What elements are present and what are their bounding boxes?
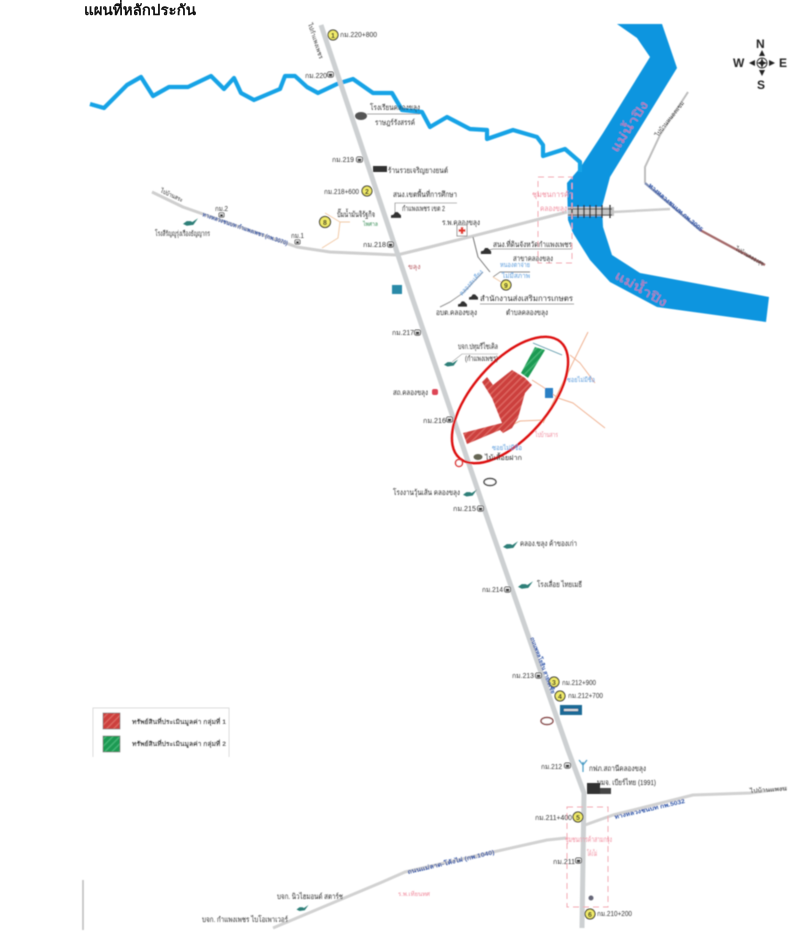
- place labels: กฟภ.สถานีคลองขลุง: [589, 764, 646, 773]
- place labels: โรงสีรัญญูรุ่งเรืองธัญญากร: [155, 229, 210, 238]
- road direction labels: ถนนพหลโยธิน สายเอเชีย: [528, 636, 557, 695]
- km markers: กม.218: [363, 242, 386, 249]
- marker numbers: 3: [552, 680, 556, 687]
- place labels: บจก.ปทุมรีไซเคิล: [458, 342, 498, 351]
- place labels: โรงงานวุ้นเส้น คลองขลุง: [393, 488, 460, 497]
- road direction labels: [158, 21, 787, 876]
- compass: N: [756, 37, 765, 51]
- property side labels: ไม้เลื้อยฝาก: [484, 451, 522, 462]
- highlight ellipse: [431, 317, 589, 483]
- km markers: [215, 32, 632, 918]
- place labels: สนง.เขตพื้นที่การศึกษา: [393, 189, 457, 199]
- marker numbers: 6: [588, 912, 592, 919]
- place labels: สถ.คลองขลุง: [393, 388, 428, 397]
- marker numbers: 8: [323, 220, 327, 227]
- km markers: กม.217: [392, 330, 414, 337]
- km markers: กม.212+900: [562, 680, 596, 687]
- legend: [93, 708, 229, 757]
- compass: S: [757, 78, 765, 92]
- km markers: กม.1: [291, 233, 304, 240]
- km markers: กม.218+600: [324, 189, 359, 196]
- road direction labels: ไปบ้านคลองสุข: [733, 244, 766, 268]
- place labels: บมจ. เบียร์ไทย (1991): [597, 778, 656, 787]
- icons: ไพศาล: [362, 220, 378, 228]
- compass: W: [733, 56, 745, 70]
- marker numbers: 9: [504, 283, 508, 290]
- km markers: กม.212: [541, 764, 562, 771]
- river label: [606, 97, 671, 310]
- zone labels: ชุมชนการค้าสามกรุง: [565, 835, 612, 844]
- zone labels: คลองขลุง: [540, 204, 567, 213]
- road direction labels: คลองสะเดียง: [458, 268, 485, 297]
- property group 2: [521, 347, 545, 378]
- property side labels: ซอยไม่มีชื่อ: [567, 375, 595, 384]
- marker numbers: 2: [365, 189, 369, 196]
- marker numbers: [323, 33, 592, 919]
- place labels: [155, 103, 656, 924]
- marker numbers: 4: [558, 694, 562, 701]
- road direction labels: ทางหลวงชนบท กพ.5032: [614, 798, 686, 821]
- km markers: กม.220+800: [340, 32, 377, 39]
- property side labels: ไปบ้านสาร: [534, 430, 558, 439]
- km markers: กม.215: [453, 506, 476, 513]
- place labels: (กำแพงเพชร): [465, 354, 498, 363]
- place labels: คลอง.ขลุง ค้าของเก่า: [520, 539, 577, 548]
- bridge: [568, 205, 614, 218]
- km markers: กม.214: [482, 587, 503, 594]
- road direction labels: ถนนแม่ลาด-โค้งไผ่ (กพ.1040): [407, 848, 495, 876]
- zone labels: ชุมชนการค้า: [532, 190, 573, 199]
- km markers: กม.220: [305, 73, 327, 80]
- place labels: สำนักงานส่งเสริมการเกษตร: [480, 294, 573, 303]
- km markers: กม.211: [553, 859, 575, 866]
- km markers: กม.213: [512, 673, 534, 680]
- km markers: กม.2: [215, 206, 228, 213]
- place labels: โรงเรียนคลองขลุง: [370, 103, 420, 112]
- place labels: บจก. นิวไฮมอนด์ สตาร์ช: [277, 892, 343, 901]
- road direction labels: ไปบ้านแพงน: [748, 784, 787, 795]
- pink dashed zones: [538, 177, 608, 907]
- road direction labels: ไปบ้านสระ: [158, 186, 184, 204]
- canal: [90, 76, 580, 172]
- property group 1: [463, 370, 532, 444]
- km markers: กม.216: [423, 418, 446, 425]
- marker numbers: 5: [576, 815, 580, 822]
- place labels: หนองตาจ่าย: [500, 262, 530, 269]
- place labels: ร้านรวยเจริญยางยนต์: [388, 166, 448, 175]
- road direction labels: ทางหลวงชนบท กำแพงเพชร (กพ.3070): [201, 210, 289, 247]
- numbered yellow markers: [320, 30, 595, 919]
- km markers: กม.210+200: [597, 911, 632, 918]
- river label: แม่น้ำปิง: [606, 97, 651, 155]
- line near property: [533, 343, 562, 355]
- zone labels: ร.พ.เทียนทศ: [398, 890, 430, 898]
- km markers: กม.219: [332, 157, 354, 164]
- km markers: กม.211+400: [535, 815, 572, 822]
- property side labels: [484, 375, 595, 462]
- road direction labels: ไปบ้านหนองแขม: [653, 99, 686, 139]
- place labels: ราษฎร์รังสรรค์: [375, 118, 415, 127]
- place labels: ตำบลคลองขลุง: [506, 308, 548, 317]
- road direction labels: ไปกำแพงเพชร: [306, 21, 325, 61]
- place labels: ไม่มีสภาพ: [501, 272, 530, 280]
- compass: [733, 37, 787, 92]
- road direction labels: ทางหลวงชนบท กพ.3005: [647, 182, 705, 234]
- km markers: กม.212+700: [568, 693, 603, 700]
- icons: [183, 112, 611, 911]
- wide river: [567, 24, 769, 322]
- property side labels: ซอยไม่มีชื่อ: [492, 443, 522, 452]
- place labels: อบต.คลองขลุง: [436, 308, 477, 317]
- zone labels: ขลุง: [408, 264, 420, 271]
- zone labels: โค้งไผ่: [587, 849, 597, 858]
- marker numbers: 1: [331, 33, 335, 40]
- legend: ทรัพย์สินที่ประเมินมูลค่า กลุ่มที่ 1: [132, 716, 226, 727]
- legend: ทรัพย์สินที่ประเมินมูลค่า กลุ่มที่ 2: [132, 738, 226, 749]
- place labels: ร.พ.คลองขลุง: [442, 218, 480, 227]
- place labels: บจก. กำแพงเพชร ไบโอเพาเวอร์: [202, 915, 288, 924]
- zone labels: [398, 190, 612, 898]
- title: แผนที่หลักประกัน: [84, 0, 196, 19]
- place labels: ปั๊มน้ำมันจิรัฐกิจ: [337, 208, 375, 219]
- compass: E: [779, 56, 787, 70]
- place labels: กำแพงเพชร เขต 2: [402, 204, 445, 213]
- place labels: สาขาคลองขลุง: [513, 254, 553, 263]
- river label: แม่น้ำปิง: [612, 267, 671, 310]
- place labels: โรงเลื่อย ไทยเมธี: [537, 579, 582, 589]
- place labels: สนง.ที่ดินจังหวัดกำแพงเพชร: [493, 239, 572, 249]
